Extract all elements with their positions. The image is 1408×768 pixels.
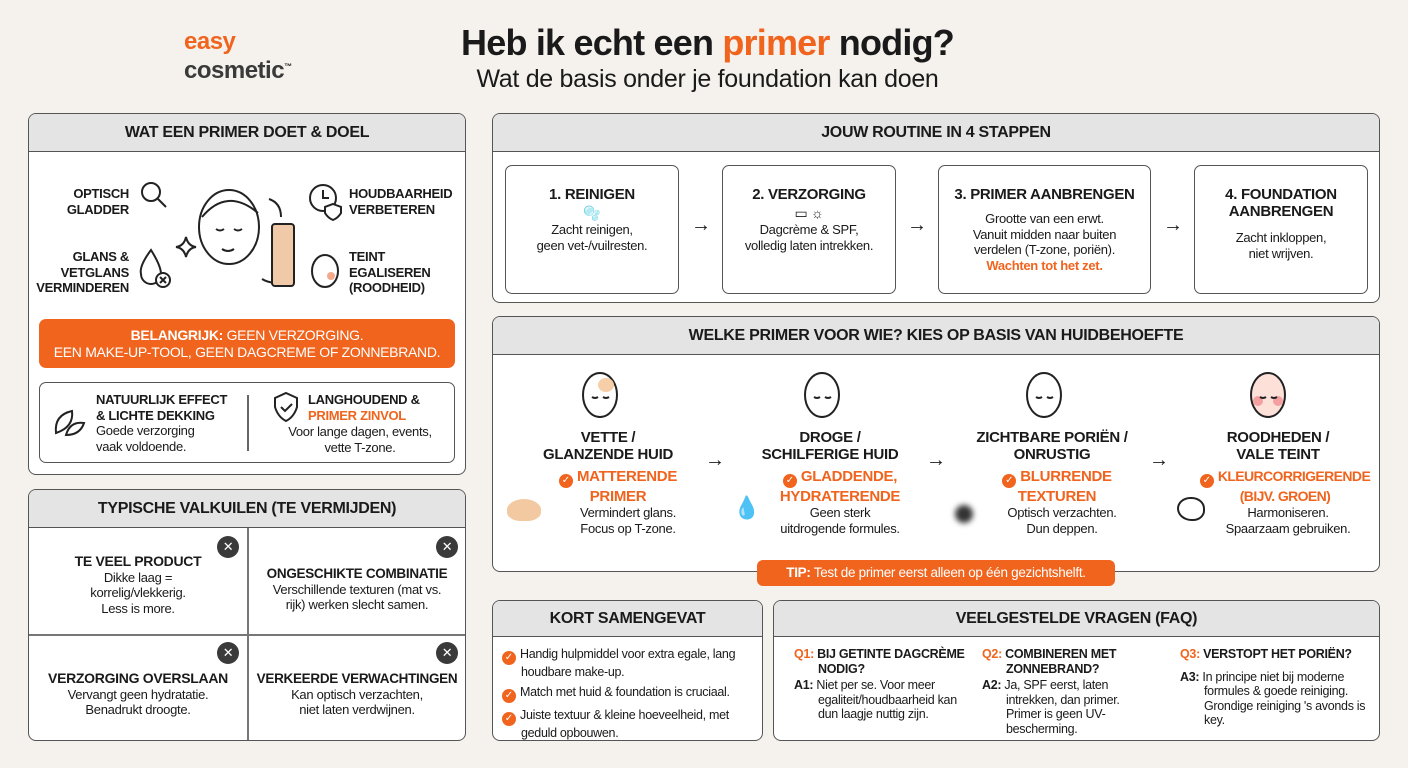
pitfall: verkeerde verwachtingen: Kan optisch verzachten, — [291, 686, 423, 702]
logo: cosmetic™ — [184, 57, 292, 84]
pitfall: verkeerde verwachtingen: VERKEERDE VERWACHTINGEN — [257, 671, 457, 686]
type 1: ✓ — [562, 475, 570, 486]
panel: kort samengevat: ✓ — [505, 690, 513, 700]
arrow: → — [1163, 214, 1183, 236]
type 4: KLEURCORRIGERENDE — [1218, 468, 1370, 484]
arrow: → — [691, 214, 711, 236]
comparison box: Goede verzorging — [96, 423, 195, 438]
panel: wat een primer doet: WAT EEN PRIMER DOET & DOEL — [125, 124, 369, 141]
type 2: uitdrogende formules. — [780, 520, 900, 536]
pitfall: verzorging overslaan: Benadrukt droogte. — [85, 702, 191, 717]
benefit labels: GLADDER — [67, 202, 129, 216]
pitfall: verzorging overslaan — [48, 670, 228, 717]
panel: welke primer — [492, 316, 1380, 572]
step 4: niet wrijven. — [1249, 246, 1313, 260]
type 1: Focus op T-zone. — [580, 520, 676, 536]
type 1: VETTE / — [581, 429, 635, 446]
faq 1: Q1: BIJ GETINTE DAGCRÈME NODIG? — [794, 647, 965, 676]
pitfall: verzorging overslaan: VERZORGING OVERSLAAN — [48, 670, 228, 686]
type 2 — [762, 429, 900, 536]
type 2: Geen sterk — [810, 505, 870, 520]
important banner: BELANGRIJK: GEEN VERZORGING. — [131, 327, 363, 343]
important banner: EEN MAKE-UP-TOOL, GEEN DAGCREME OF ZONNEBRAND. — [54, 344, 440, 360]
pitfall: ongeschikte combinatie — [267, 566, 448, 612]
panel: wat een primer doet: VERBETEREN — [349, 202, 435, 216]
comparison box: LANGHOUDEND & — [308, 392, 420, 407]
panel: welke primer: → — [705, 449, 725, 471]
type 4: ✓ — [1203, 475, 1211, 486]
step 4: 4. FOUNDATION — [1225, 186, 1337, 203]
pitfall: ongeschikte combinatie: Verschillende texturen (mat vs. — [273, 582, 441, 596]
faq 2 — [982, 647, 1120, 736]
logo: easy — [184, 28, 235, 55]
panel: wat een primer doet: VERMINDEREN — [36, 280, 129, 295]
comparison box: vaak voldoende. — [96, 438, 186, 454]
pitfall: te veel product — [74, 553, 202, 616]
panel: kort samengevat: ✓ — [505, 712, 513, 724]
benefit labels — [67, 186, 129, 216]
panel: kort samengevat: KORT SAMENGEVAT — [550, 610, 705, 627]
step 1: Zacht reinigen, — [551, 222, 633, 237]
panel: welke primer: WELKE PRIMER VOOR WIE? KIES OP BASIS VAN HUIDBEHOEFTE — [689, 327, 1183, 344]
type 4: (BIJV. GROEN) — [1240, 488, 1330, 504]
panel: kort samengevat: Handig hulpmiddel voor extra egale, lang houdbare make-up. — [520, 647, 735, 679]
step 4 — [1194, 165, 1368, 294]
icons: face and tube — [141, 182, 295, 287]
faq 3: Q3: VERSTOPT HET PORIËN? — [1180, 647, 1352, 661]
title: Heb ik echt een primer nodig? — [461, 22, 954, 63]
type 3 — [976, 429, 1128, 536]
step 2 — [722, 165, 896, 294]
step 3: Grootte van een erwt. — [985, 211, 1104, 226]
type 3: TEXTUREN — [1018, 488, 1096, 505]
step 3 — [938, 165, 1151, 294]
important banner — [39, 319, 455, 368]
faq 2: A2: Ja, SPF eerst, laten intrekken, dan primer. Primer is geen UV-bescherming. — [982, 678, 1120, 736]
comparison box: Voor lange dagen, events, — [288, 424, 432, 439]
panel: welke primer: 💧 — [733, 495, 760, 520]
panel: faq — [773, 600, 1380, 741]
comparison box: NATUURLIJK EFFECT — [96, 392, 227, 407]
panel: welke primer: → — [1149, 449, 1169, 471]
panel: kort samengevat — [492, 600, 763, 741]
step 1: 🫧 — [583, 205, 601, 221]
panel: valkuilen: ✕ — [223, 539, 233, 554]
panel: wat een primer doet: TEINT — [349, 249, 385, 264]
type 2: DROGE / — [799, 429, 861, 446]
logo — [184, 28, 292, 84]
type 4 — [1200, 429, 1370, 536]
pitfall: verkeerde verwachtingen — [256, 671, 457, 717]
type 2: HYDRATERENDE — [780, 488, 900, 505]
type 3: ✓ — [1005, 475, 1013, 486]
comparison box — [39, 382, 455, 463]
comparison box: & LICHTE DEKKING — [96, 408, 215, 422]
arrow: → — [907, 214, 927, 236]
faq 1: A1: Niet per se. Voor meer egaliteit/houdbaarheid kan dun laagje nuttig zijn. — [794, 678, 957, 721]
type 4: Spaarzaam gebruiken. — [1226, 520, 1350, 536]
step 1: 1. REINIGEN — [549, 186, 635, 203]
panel: wat een primer doet: (ROODHEID) — [349, 280, 425, 295]
panel: wat een primer doet: HOUDBAARHEID — [349, 186, 452, 201]
step 3: 3. PRIMER AANBRENGEN — [954, 186, 1135, 203]
pitfall: verzorging overslaan: Vervangt geen hydratatie. — [68, 686, 208, 702]
panel: valkuilen: ✕ — [442, 539, 452, 554]
step 2: Dagcrème & SPF, — [760, 222, 858, 237]
pitfall: te veel product: Less is more. — [101, 600, 175, 616]
type 4: VALE TEINT — [1236, 446, 1320, 463]
type 3: Dun deppen. — [1026, 520, 1098, 536]
faq 1 — [794, 646, 965, 721]
panel: kort samengevat: Juiste textuur & kleine hoeveelheid, met geduld opbouwen. — [520, 708, 729, 740]
type 1: PRIMER — [590, 488, 646, 505]
panel: valkuilen — [28, 489, 466, 741]
tip pill: TIP: Test de primer eerst alleen op één gezichtshelft. — [786, 565, 1086, 580]
pitfall: ongeschikte combinatie: rijk) werken slecht samen. — [286, 597, 428, 612]
step 4: Zacht inkloppen, — [1236, 230, 1326, 245]
panel: wat een primer doet — [28, 113, 466, 475]
step 1: geen vet-/vuilresten. — [537, 238, 647, 252]
type 3: Optisch verzachten. — [1007, 505, 1117, 520]
panel: welke primer: → — [926, 449, 946, 471]
panel: routine — [492, 113, 1380, 303]
panel: kort samengevat: ✓ — [505, 652, 513, 663]
type 1 — [543, 429, 677, 536]
pitfall: te veel product: TE VEEL PRODUCT — [75, 553, 201, 569]
panel: faq: VEELGESTELDE VRAGEN (FAQ) — [956, 610, 1197, 627]
type 3: ZICHTBARE PORIËN / — [976, 429, 1128, 446]
step 2: ▭ ☼ — [794, 205, 824, 221]
step 3: Vanuit midden naar buiten — [973, 226, 1116, 242]
panel: valkuilen: ✕ — [223, 645, 233, 660]
type 1: MATTERENDE — [577, 468, 677, 485]
step 4: AANBRENGEN — [1229, 203, 1333, 220]
step 2: 2. VERZORGING — [752, 186, 866, 203]
type 3: BLURRENDE — [1020, 468, 1112, 485]
pitfall: verkeerde verwachtingen: niet laten verdwijnen. — [299, 702, 415, 717]
pitfall: ongeschikte combinatie: ONGESCHIKTE COMBINATIE — [267, 566, 447, 581]
type 2: ✓ — [786, 475, 794, 486]
comparison box: PRIMER ZINVOL — [308, 408, 406, 422]
panel: valkuilen: TYPISCHE VALKUILEN (TE VERMIJDEN) — [98, 500, 396, 517]
pitfall: te veel product: korrelig/vlekkerig. — [90, 585, 186, 600]
type 4: ROODHEDEN / — [1227, 429, 1329, 446]
step 3: Wachten tot het zet. — [986, 258, 1103, 272]
type 1: GLANZENDE HUID — [543, 446, 673, 463]
step 1 — [505, 165, 679, 294]
panel: wat een primer doet: VETGLANS — [61, 264, 129, 280]
panel: wat een primer doet: GLANS & — [73, 249, 129, 264]
type 3: ONRUSTIG — [1014, 446, 1090, 463]
step 3: verdelen (T-zone, poriën). — [974, 242, 1115, 257]
panel: wat een primer doet: EGALISEREN — [349, 264, 431, 280]
tip pill — [757, 560, 1115, 586]
comparison box: vette T-zone. — [324, 440, 396, 454]
type 2: SCHILFERIGE HUID — [762, 446, 898, 463]
type 2: GLADDENDE, — [801, 468, 897, 485]
faq 3: A3: In principe niet bij moderne formules & goede reiniging. Grondige reiniging 's avonds is key. — [1180, 670, 1365, 727]
panel: valkuilen: ✕ — [442, 645, 452, 660]
pitfall: te veel product: Dikke laag = — [104, 570, 172, 584]
step 2: volledig laten intrekken. — [745, 238, 873, 252]
benefit labels: OPTISCH — [73, 186, 129, 201]
faces — [582, 372, 1286, 418]
panel: routine: JOUW ROUTINE IN 4 STAPPEN — [821, 124, 1051, 141]
faq 2: Q2: COMBINEREN MET ZONNEBRAND? — [982, 647, 1116, 676]
type 4: Harmoniseren. — [1247, 505, 1329, 520]
panel: kort samengevat: Match met huid & foundation is cruciaal. — [520, 684, 730, 698]
type 1: Vermindert glans. — [580, 505, 676, 520]
subtitle: Wat de basis onder je foundation kan doen — [476, 65, 939, 93]
